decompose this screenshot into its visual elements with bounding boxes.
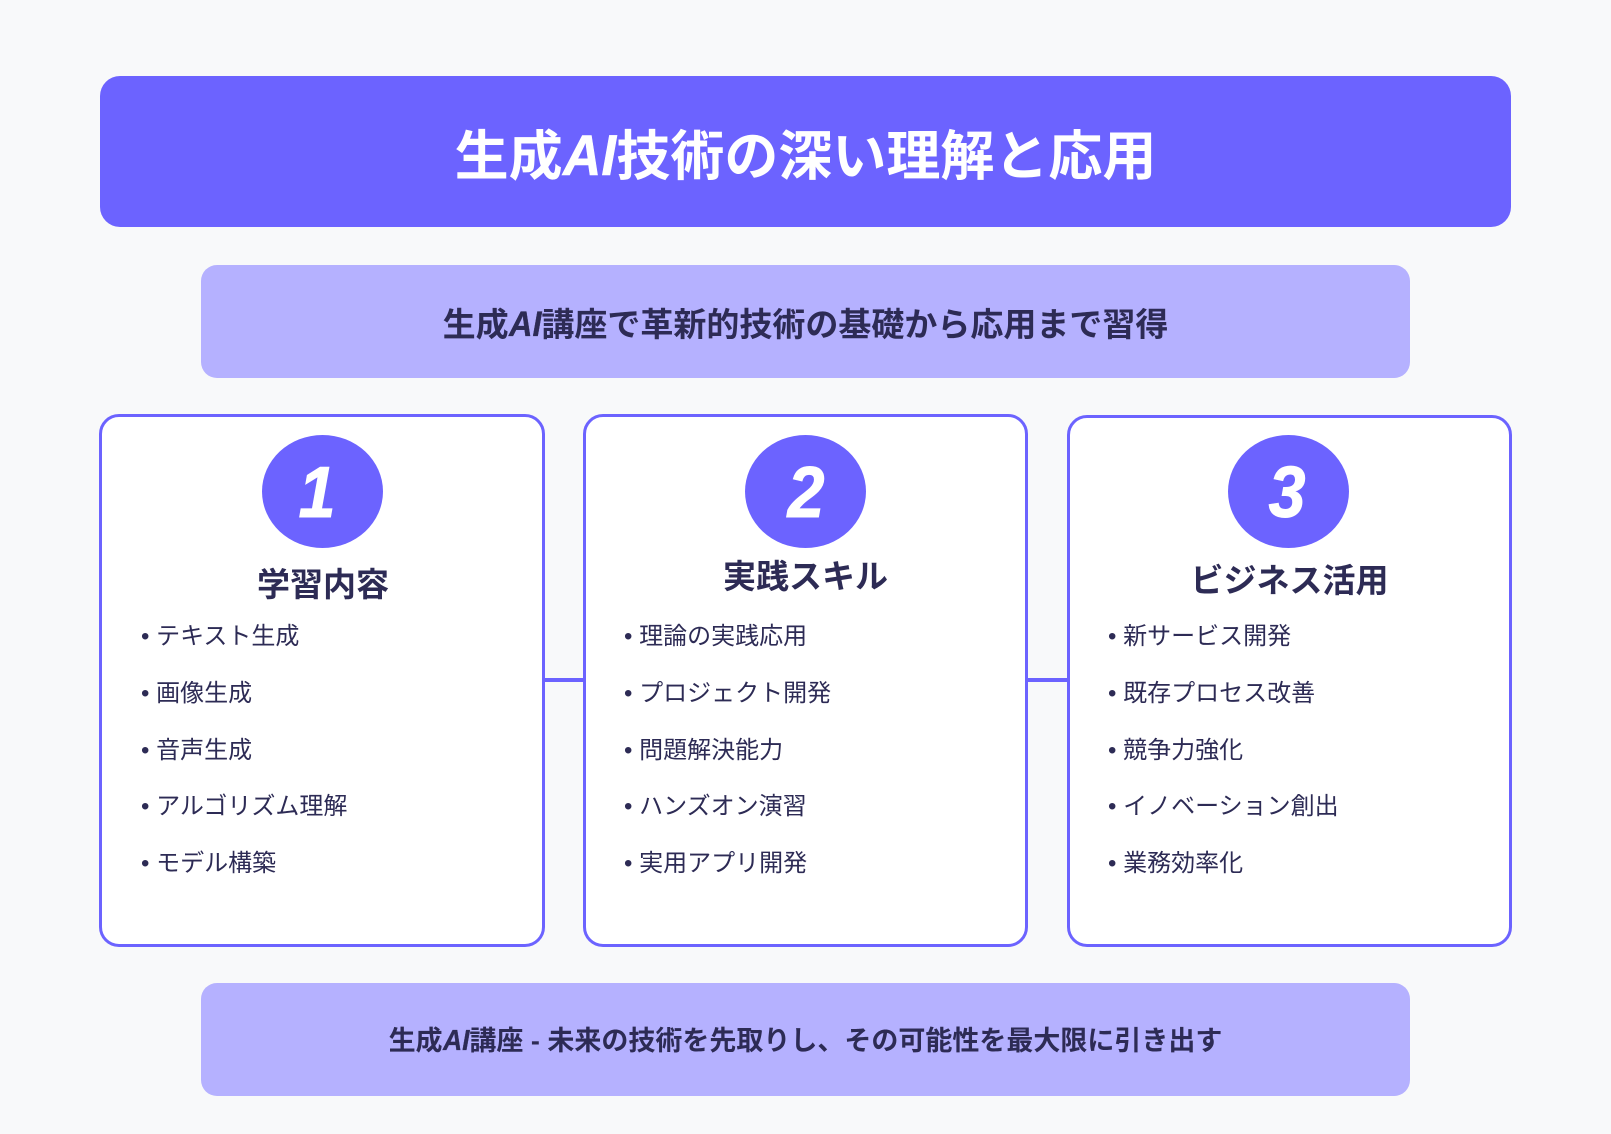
footer banner	[201, 983, 1410, 1096]
subtitle banner	[201, 265, 1410, 378]
bullet: model building: • モデル構築	[141, 850, 276, 877]
title banner: AI	[563, 124, 616, 188]
title banner	[100, 76, 1511, 227]
heading: practical skills: 実践スキル	[723, 558, 888, 595]
connector: card 2 to card 3	[1027, 678, 1068, 682]
bullet: algorithm understanding: • アルゴリズム理解	[141, 793, 347, 820]
bullet: competitiveness: • 競争力強化	[1108, 737, 1243, 764]
number badge 1: 1	[299, 452, 335, 532]
bullet: project development: • プロジェクト開発	[624, 680, 831, 707]
bullet: applying theory: • 理論の実践応用	[624, 623, 807, 650]
panel: business use	[1067, 415, 1512, 947]
subtitle banner: AI	[509, 305, 541, 344]
connector: card 1 to card 2	[544, 678, 584, 682]
title banner: 生成 技術の深い理解と応用	[455, 127, 1156, 187]
subtitle banner: 生成 講座で革新的技術の基礎から応用まで習得	[443, 306, 1168, 343]
bullet: practical app development: • 実用アプリ開発	[624, 850, 807, 877]
bullet: hands-on exercises: • ハンズオン演習	[624, 793, 807, 820]
panel: learning content	[99, 414, 545, 947]
number badge 3	[1228, 435, 1349, 548]
bullet: process improvement: • 既存プロセス改善	[1108, 680, 1315, 707]
number badge 2	[745, 435, 866, 548]
bullet: innovation creation: • イノベーション創出	[1108, 793, 1339, 820]
bullet: text generation: • テキスト生成	[141, 623, 299, 650]
bullet: new service development: • 新サービス開発	[1108, 623, 1291, 650]
footer banner: AI	[443, 1025, 469, 1057]
bullet: operational efficiency: • 業務効率化	[1108, 850, 1243, 877]
panel: practical skills	[583, 414, 1028, 947]
number badge 1	[262, 435, 383, 548]
number badge 2: 2	[788, 452, 824, 532]
bullet: problem solving: • 問題解決能力	[624, 737, 783, 764]
bullet: audio generation: • 音声生成	[141, 737, 252, 764]
heading: learning content: 学習内容	[257, 566, 389, 603]
heading: business use: ビジネス活用	[1190, 562, 1388, 599]
number badge 3: 3	[1269, 452, 1306, 532]
bullet: image generation: • 画像生成	[141, 680, 252, 707]
footer banner: 生成 講座 - 未来の技術を先取りし、その可能性を最大限に引き出す	[389, 1026, 1222, 1056]
